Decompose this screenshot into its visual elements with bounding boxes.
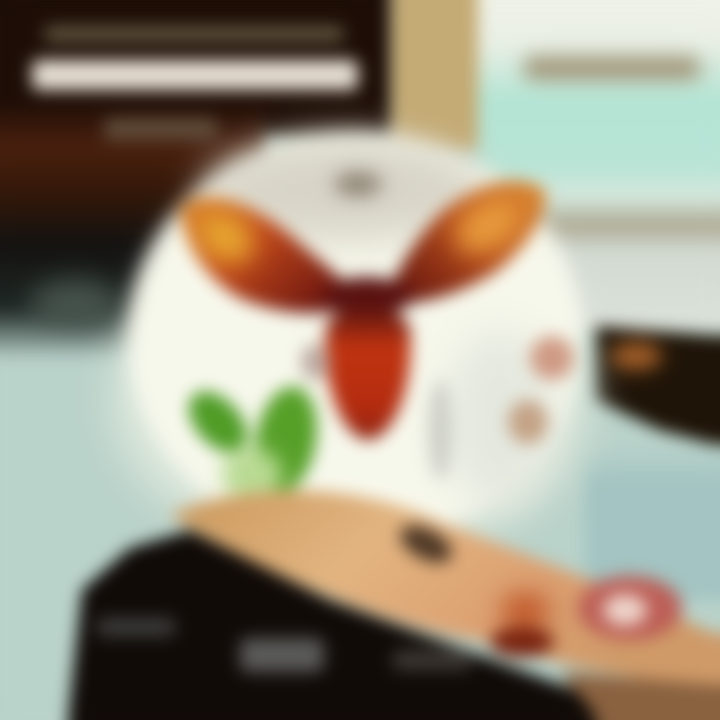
icon: moth — [180, 181, 546, 440]
text block: bottom labels — [96, 618, 472, 672]
icon: right circle marks — [301, 336, 574, 480]
icon: pink flower — [578, 576, 682, 640]
panel: wooden branch — [170, 490, 720, 720]
panel: lower right teal area — [585, 445, 720, 600]
panel: bottom dark base — [68, 530, 660, 720]
icon: dark mark on branch — [394, 518, 458, 570]
panel: tan window frame — [392, 0, 478, 150]
panel: central white circle — [127, 132, 583, 544]
panel: top left dark header — [0, 0, 390, 360]
panel: right dark block — [596, 326, 720, 446]
panel: soft halo behind circle — [110, 240, 590, 560]
icon: green leaves — [178, 381, 325, 500]
icon: red insect on branch — [490, 592, 554, 657]
moth left wing highlight — [189, 203, 263, 273]
moth right wing highlight — [445, 187, 531, 265]
text block: top right heading — [524, 56, 700, 80]
moth left wing — [180, 198, 355, 313]
panel: top right bright window — [478, 0, 720, 330]
icon: small mark at top of circle — [334, 172, 382, 196]
moth right wing — [385, 181, 546, 304]
moth body — [325, 308, 411, 440]
moth thorax — [323, 277, 411, 317]
text block: top left heading — [32, 26, 358, 140]
